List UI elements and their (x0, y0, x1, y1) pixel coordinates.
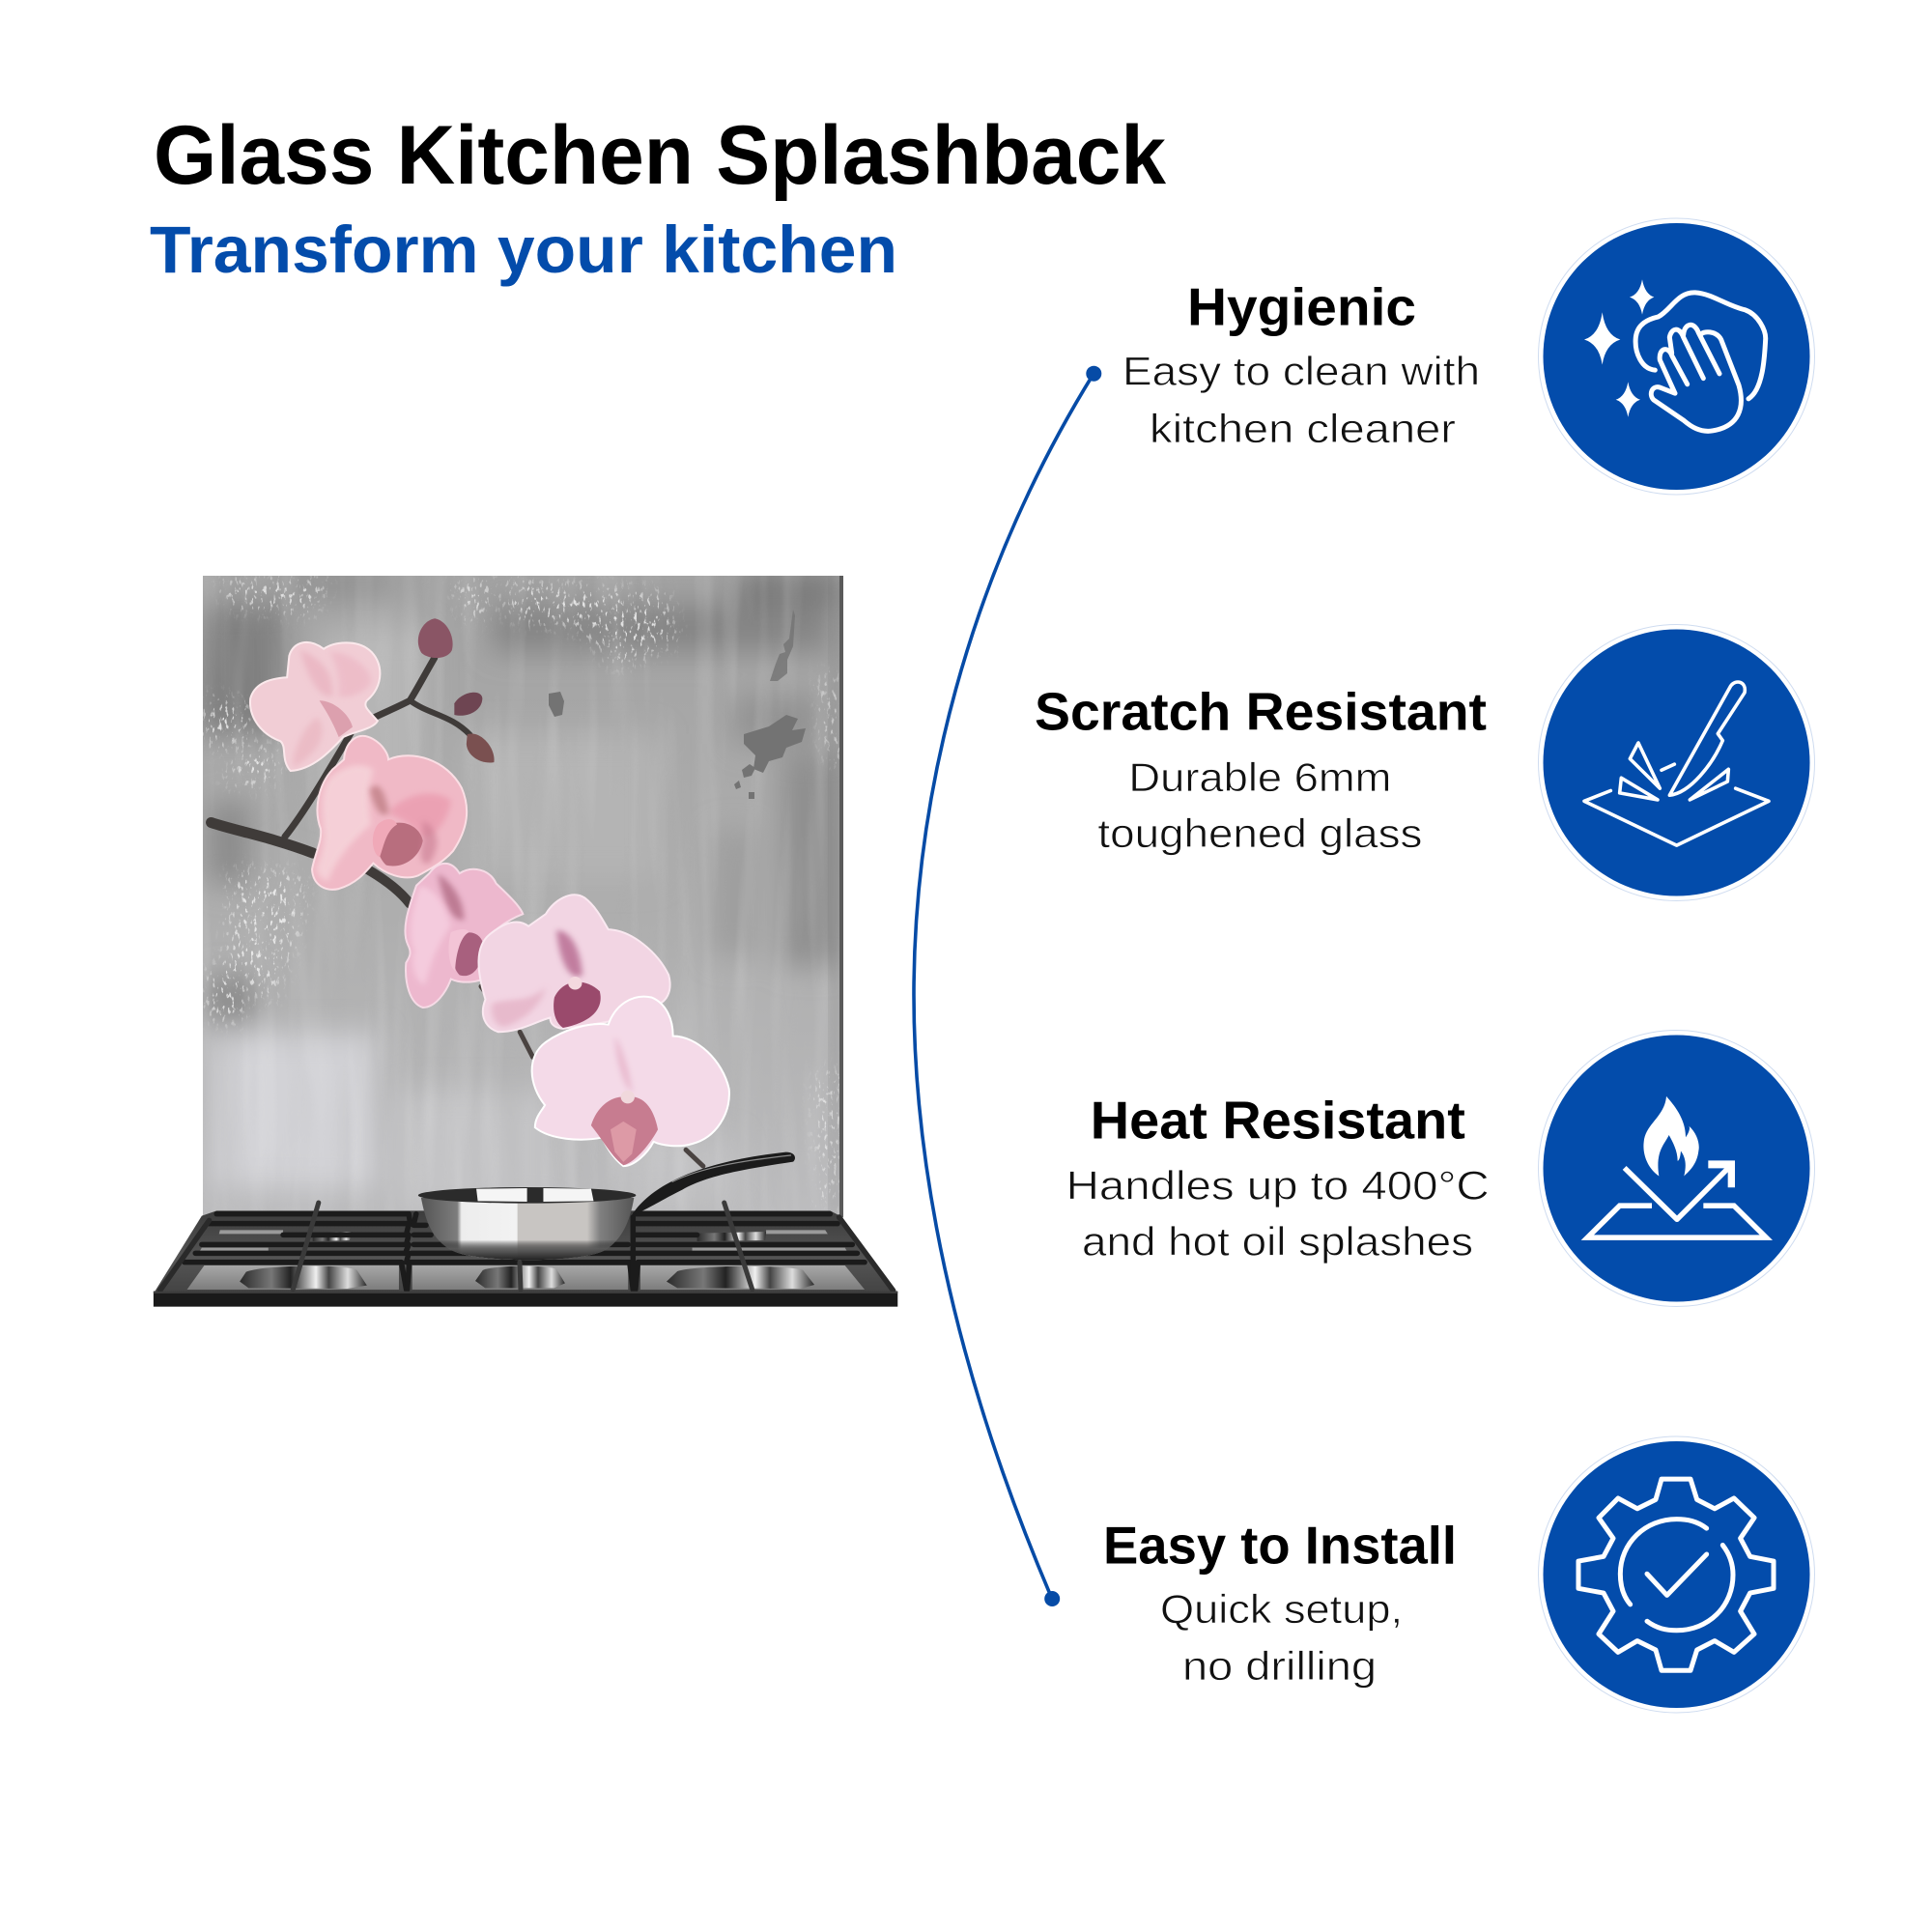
feature: heat resistant (1066, 1091, 1490, 1264)
flower 4 (478, 895, 670, 1032)
grates (160, 1203, 894, 1291)
frying pan (418, 1152, 795, 1260)
feature: hygienic (1122, 276, 1480, 451)
description (1066, 1162, 1490, 1264)
flower 5 (532, 997, 729, 1166)
dark paint chips (549, 610, 806, 799)
flower 2 (312, 736, 467, 890)
description (1097, 754, 1422, 856)
pan rim and interior (418, 1187, 636, 1204)
title: Glass Kitchen Splashback (154, 109, 1166, 202)
burners (240, 1266, 367, 1289)
heading: Hygienic (1187, 276, 1416, 336)
icon: gear with checkmark (1538, 1436, 1814, 1713)
orchid flowers (250, 642, 729, 1166)
flower 1 (250, 642, 380, 771)
panel: splashback product image (154, 570, 897, 1307)
description: Quick setup, (1160, 1586, 1403, 1632)
description: no drilling (1182, 1643, 1377, 1689)
description (1160, 1586, 1403, 1689)
burner plates (187, 1265, 399, 1290)
icon: hand wiping with sparkles (1538, 218, 1814, 495)
heading: Easy to Install (1103, 1515, 1457, 1575)
right edge of glass (831, 576, 839, 1217)
splashback painted background (198, 570, 843, 1252)
description: kitchen cleaner (1150, 406, 1456, 451)
feature: scratch resistant (1035, 682, 1487, 856)
hob body (155, 1210, 895, 1292)
orchid stems and buds (212, 618, 703, 1166)
description: toughened glass (1097, 810, 1422, 856)
icon: flame on glass with arrow (1538, 1030, 1814, 1306)
feature: easy to install (1103, 1515, 1457, 1689)
description: Durable 6mm (1128, 754, 1391, 800)
description: and hot oil splashes (1082, 1218, 1473, 1264)
heading: Scratch Resistant (1035, 682, 1487, 742)
hob front edge (154, 1292, 897, 1307)
pan bowl (421, 1198, 634, 1260)
curved connector line (914, 366, 1101, 1606)
subtitle: Transform your kitchen (150, 213, 897, 287)
cooktop (154, 1203, 897, 1307)
icon: knife scratching glass (1538, 624, 1814, 900)
heading: Heat Resistant (1091, 1091, 1465, 1151)
description: Handles up to 400°C (1066, 1162, 1490, 1208)
description: Easy to clean with (1122, 349, 1480, 394)
description (1122, 349, 1480, 451)
flower 3 (405, 864, 523, 1008)
pan handle (631, 1152, 795, 1217)
